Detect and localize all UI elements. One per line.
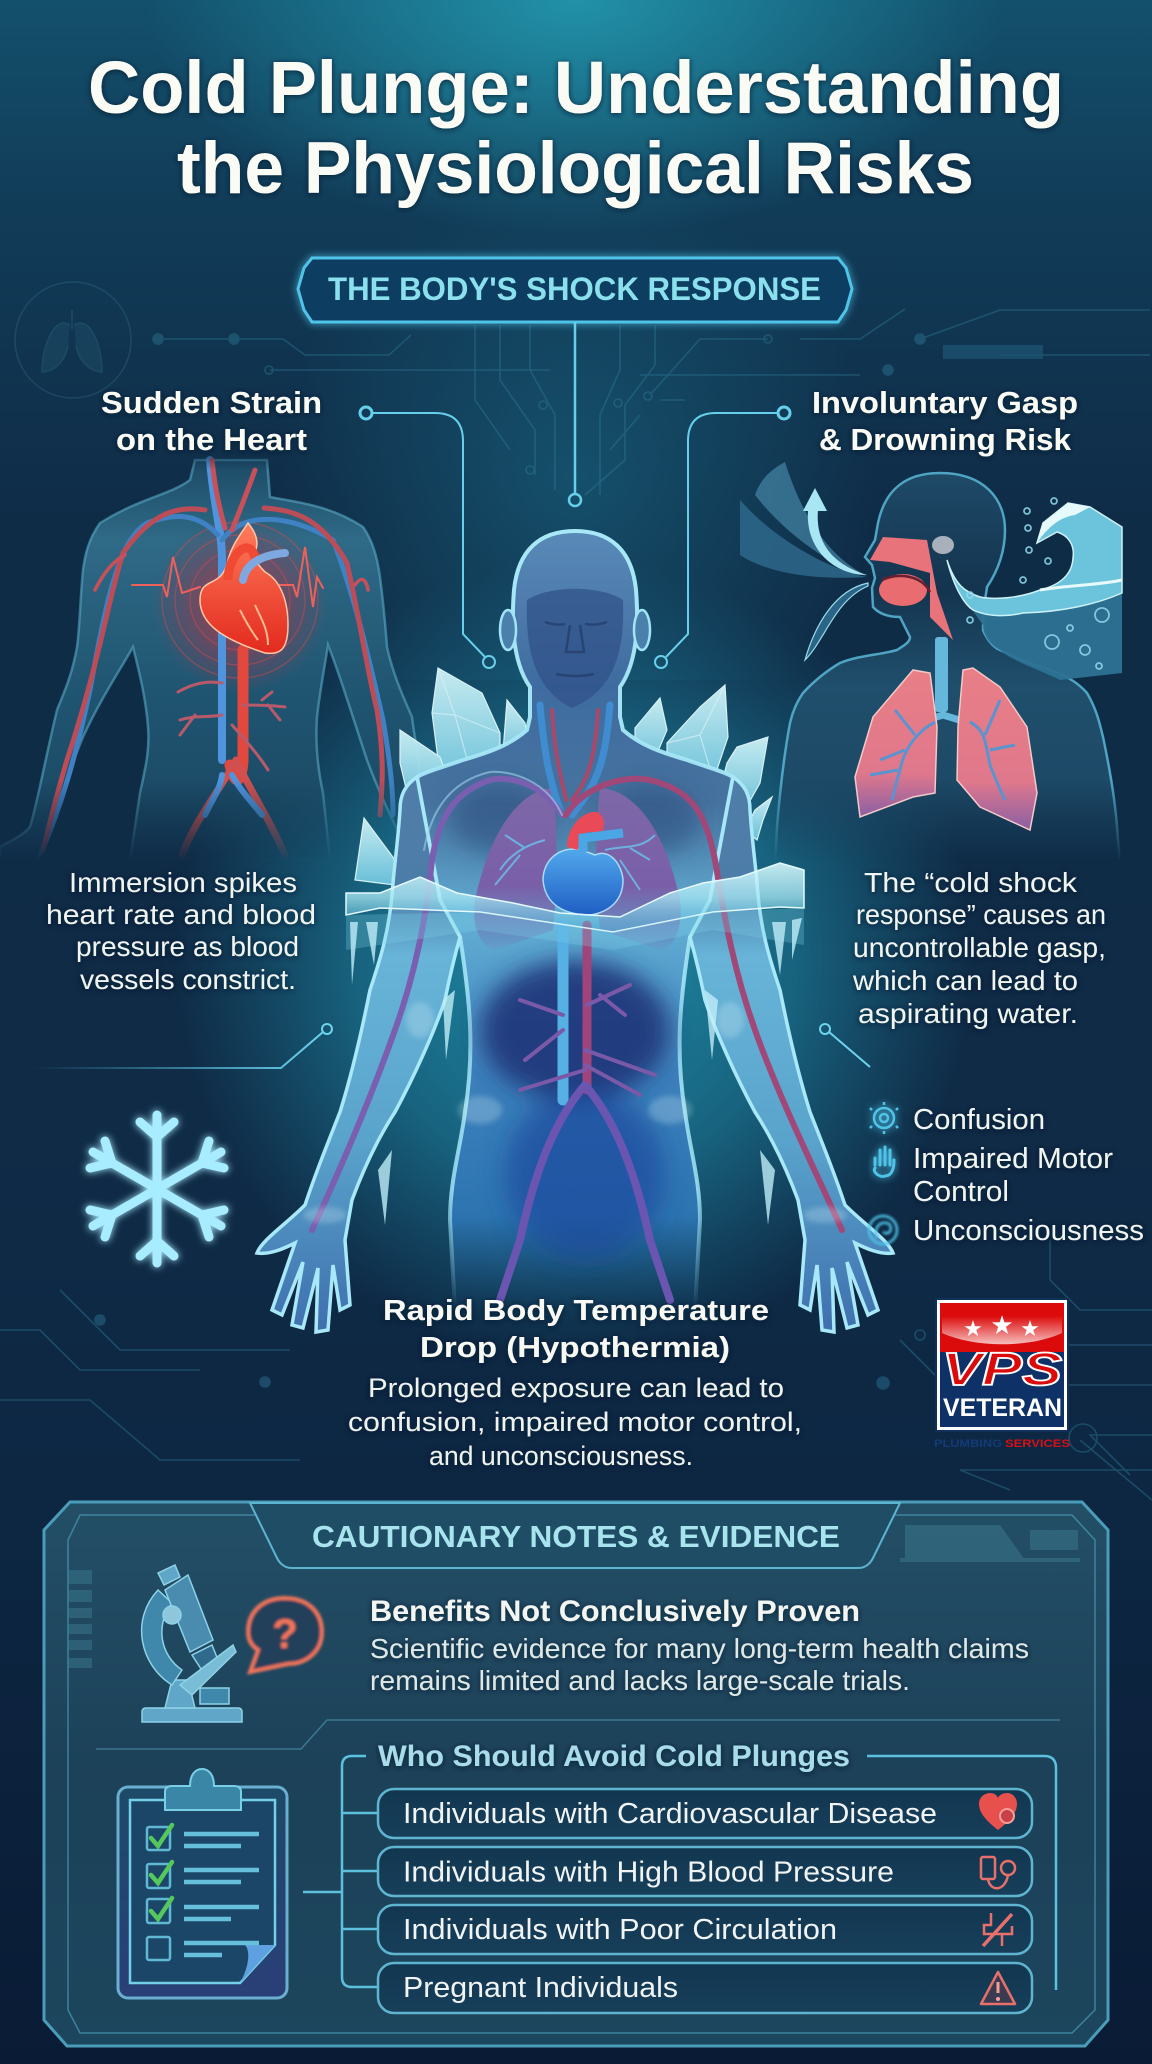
section heading: the body's shock response: THE BODY'S SHOCK RESPONSE (328, 271, 821, 307)
text: cold shock description: which can lead to (852, 965, 1078, 996)
list item: cardiovascular disease: Individuals with Cardiovascular Disease (403, 1798, 937, 1830)
lungs (855, 670, 937, 817)
text: heart immersion description: heart rate and blood (46, 899, 316, 930)
air gust and arrow (740, 462, 868, 660)
list item: poor circulation: Individuals with Poor Circulation (403, 1914, 837, 1946)
title: the Physiological Risks (177, 128, 974, 209)
symptom list (869, 1102, 1144, 1247)
list item: high blood pressure (378, 1847, 1032, 1896)
logo: VPS Veteran Plumbing Services: SERVICES (1005, 1438, 1070, 1450)
figure: head with airway, lungs and water (740, 462, 1122, 865)
logo: VPS Veteran Plumbing Services: ★ (1020, 1316, 1040, 1341)
symptom labels (913, 1104, 1144, 1247)
text: rapid body temperature drop: and unconsciousness. (429, 1441, 693, 1471)
text: rapid body temperature drop: Rapid Body Temperature (383, 1295, 769, 1327)
symptom labels: Impaired Motor (913, 1143, 1113, 1175)
heart (543, 849, 623, 915)
connector lines from heading (360, 322, 790, 668)
text: benefits not conclusively proven: remains limited and lacks large-scale trials. (370, 1665, 910, 1696)
torso and head (417, 531, 733, 1310)
water (965, 593, 1122, 680)
side connector lines (30, 1024, 1120, 1068)
icon: hand (874, 1147, 894, 1176)
icon: blood pressure cuff (981, 1857, 1015, 1888)
text: heart immersion description: pressure as blood (76, 931, 299, 962)
heading: involuntary gasp and drowning risk: & Drowning Risk (819, 422, 1072, 457)
subheading: who should avoid cold plunges: Who Should Avoid Cold Plunges (378, 1740, 850, 1773)
text: rapid body temperature drop: confusion, impaired motor control, (348, 1407, 802, 1437)
icicles and frost (350, 918, 802, 1225)
heading: sudden strain on the heart: on the Heart (116, 422, 307, 457)
logo: VPS Veteran Plumbing Services: PLUMBING (934, 1438, 1002, 1450)
decorative bars (68, 1525, 1080, 1668)
text: benefits not conclusively proven: Benefits Not Conclusively Proven (370, 1595, 860, 1628)
text: heart immersion description: vessels constrict. (80, 964, 296, 995)
icon: spiral (869, 1216, 897, 1244)
logo: VPS Veteran Plumbing Services: ★ (963, 1316, 983, 1341)
figure: central frozen body (257, 531, 893, 1332)
text: cold shock description: The “cold shock (864, 867, 1078, 898)
text: rapid body temperature drop: Prolonged exposure can lead to (368, 1373, 784, 1403)
symptom labels: Confusion (913, 1104, 1045, 1136)
icon: crossed vessel (983, 1913, 1012, 1946)
section heading: the body's shock response (0, 258, 1152, 322)
icon: snowflake (90, 1115, 224, 1263)
divider (96, 1720, 1060, 1749)
icon: question bubble: ? (272, 1610, 298, 1657)
list item: pregnant individuals (378, 1963, 1032, 2013)
heading: involuntary gasp and drowning risk (812, 385, 1078, 457)
background circuit traces (0, 309, 1152, 1500)
text: benefits not conclusively proven: Scientific evidence for many long-term health claims (370, 1633, 1029, 1664)
logo: VPS Veteran Plumbing Services (934, 1298, 1070, 1450)
airway (870, 537, 953, 640)
icon: microscope (142, 1565, 242, 1722)
connector tree (303, 1756, 1056, 1990)
heading: sudden strain on the heart: Sudden Strain (101, 385, 322, 420)
icon: confusion (870, 1102, 898, 1134)
list item: poor circulation (378, 1905, 1032, 1954)
text: rapid body temperature drop: Drop (Hypothermia) (420, 1332, 730, 1364)
panel heading tab: CAUTIONARY NOTES & EVIDENCE (312, 1519, 840, 1554)
face (527, 589, 623, 708)
lungs (474, 788, 557, 950)
text: heart immersion description: Immersion spikes (69, 867, 297, 898)
icon: checklist clipboard (118, 1769, 287, 1998)
panel: cautionary notes and evidence (44, 1502, 1108, 2046)
ice crystals (355, 668, 772, 885)
symptom labels: Control (913, 1176, 1009, 1208)
text: cold shock description: uncontrollable gasp, (853, 932, 1106, 963)
arms (257, 777, 460, 1332)
title: Cold Plunge: Understanding (88, 46, 1064, 129)
heading: sudden strain on the heart (101, 385, 322, 457)
text: rapid body temperature drop (348, 1295, 802, 1471)
figure: torso with red heart and vessels (0, 460, 419, 875)
logo: VPS Veteran Plumbing Services: VPS (942, 1343, 1062, 1395)
text: heart immersion description (46, 867, 316, 995)
logo: VPS Veteran Plumbing Services: ★ (990, 1310, 1014, 1340)
text: cold shock description (852, 867, 1106, 1029)
logo: VPS Veteran Plumbing Services: VETERAN (943, 1394, 1062, 1422)
water surface (346, 863, 804, 932)
panel heading tab (250, 1503, 900, 1568)
text: benefits not conclusively proven (370, 1595, 1029, 1696)
symptom labels: Unconsciousness (913, 1215, 1144, 1247)
abdomen shading (450, 785, 700, 1260)
list item: cardiovascular disease (378, 1789, 1032, 1838)
title (88, 46, 1064, 209)
ears (500, 610, 516, 650)
blood vessels (312, 705, 842, 1300)
text: cold shock description: response” causes an (856, 899, 1106, 930)
list item: high blood pressure: Individuals with High Blood Pressure (403, 1856, 894, 1888)
heading: involuntary gasp and drowning risk: Involuntary Gasp (812, 385, 1078, 420)
icon: heart (979, 1793, 1017, 1830)
text: cold shock description: aspirating water. (858, 998, 1078, 1029)
list item: pregnant individuals: Pregnant Individuals (403, 1972, 678, 2004)
icon: warning triangle (981, 1972, 1015, 2004)
icon: question bubble (248, 1598, 322, 1672)
icon: faint lungs in circle (15, 282, 131, 398)
